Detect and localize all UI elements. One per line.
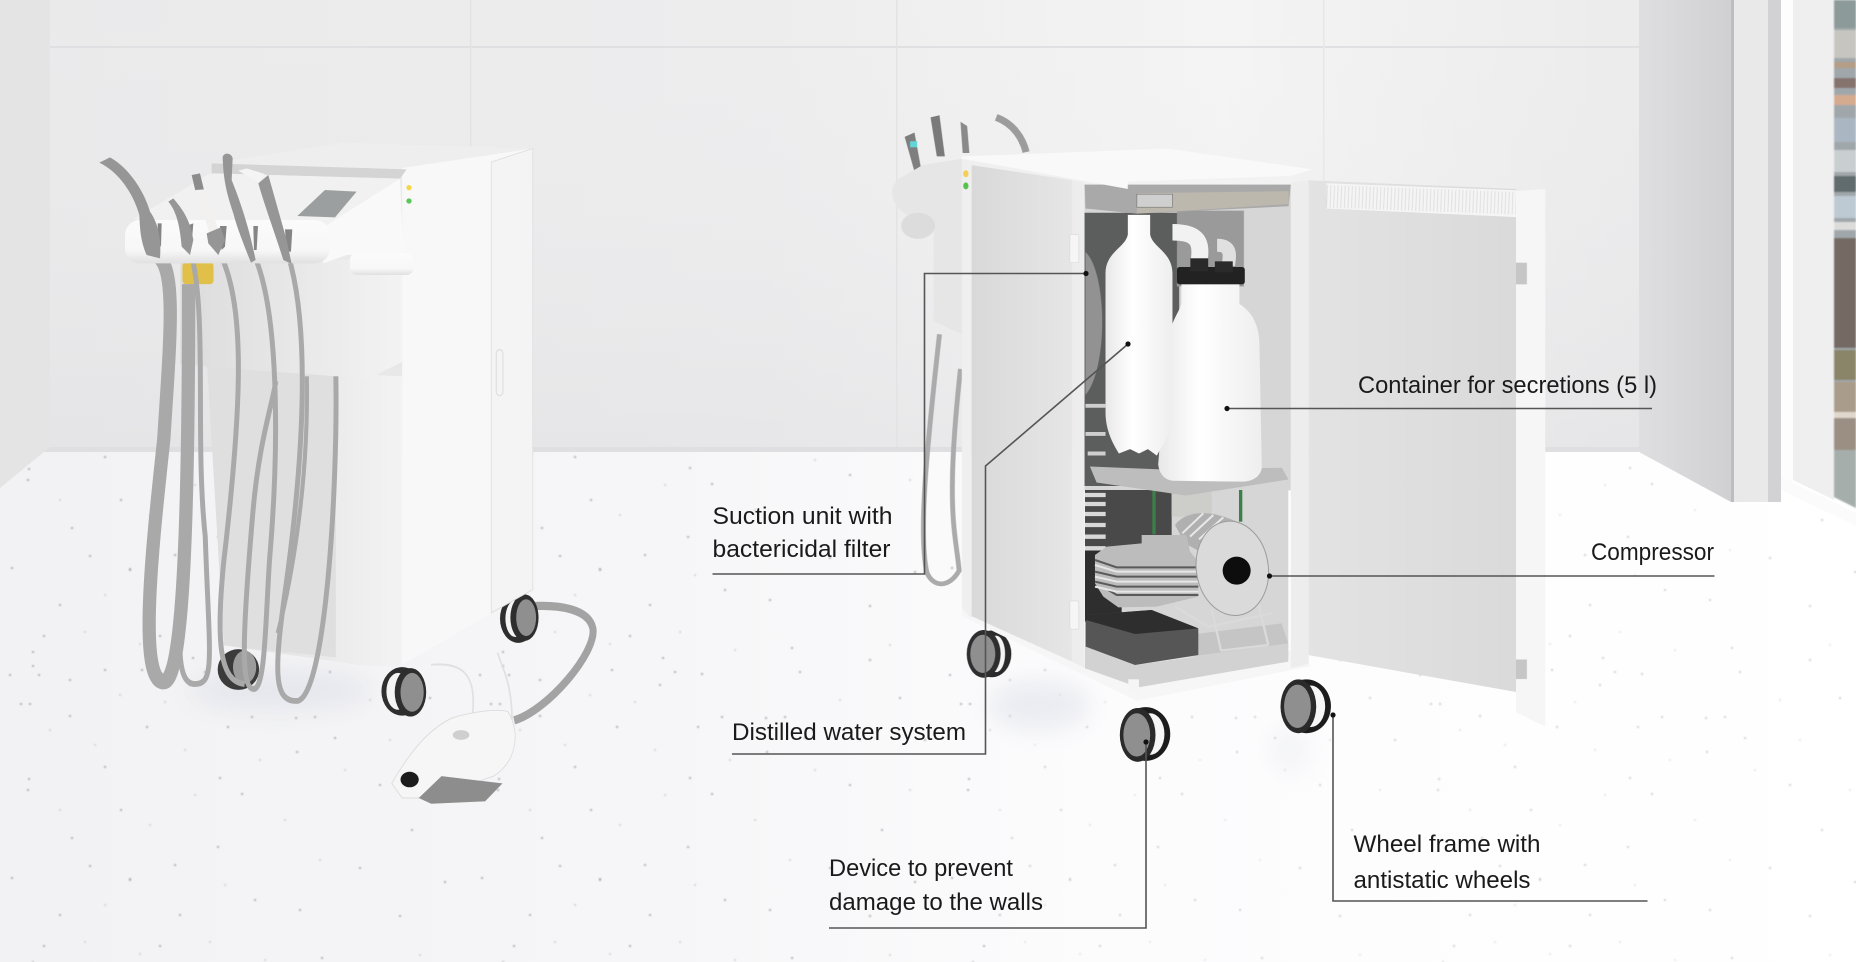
pipes — [1172, 232, 1229, 265]
floor shadows — [190, 670, 1312, 776]
callout: wheel frame: Wheel frame with — [1354, 831, 1540, 858]
rear right wheel — [500, 594, 539, 643]
compressor motor block — [1095, 535, 1198, 607]
callout: suction unit: Suction unit with — [712, 503, 892, 530]
front wheel — [381, 667, 426, 717]
city view through window — [1834, 0, 1856, 508]
rear hidden wheel — [218, 649, 259, 690]
rear wheel — [967, 630, 1011, 678]
callout: distilled water system: Distilled water system — [732, 719, 966, 746]
callout: compressor: Compressor — [1591, 539, 1714, 566]
door vents — [1326, 183, 1516, 217]
column — [1731, 0, 1769, 502]
cart top plate — [214, 143, 533, 175]
callout: wheel frame — [1330, 712, 1648, 901]
right cart lower compartment with compressor — [1085, 488, 1288, 693]
rim — [962, 156, 972, 618]
floor speckles — [0, 450, 1856, 962]
callout: suction unit: bactericidal filter — [712, 536, 891, 563]
yellow connector — [182, 262, 214, 284]
console back — [892, 159, 962, 334]
door — [1309, 180, 1516, 692]
rear handpieces — [905, 115, 1026, 172]
compressor intake hole — [1223, 557, 1251, 585]
callout: distilled water system — [732, 341, 1131, 754]
back wall — [0, 0, 1700, 450]
upper cabinet interior — [1085, 185, 1291, 490]
rail holders — [158, 223, 292, 252]
callout: compressor — [1267, 539, 1714, 579]
callout: container for secretions: Container for secretions (5 l) — [1358, 372, 1657, 399]
frame foot — [1128, 679, 1139, 693]
window frame — [1768, 0, 1781, 502]
right wall — [1639, 0, 1731, 502]
side panel — [972, 165, 1072, 662]
hoses at back — [923, 334, 960, 584]
callout: device to prevent damage: Device to prevent — [829, 855, 1013, 882]
compressor fins housing — [1175, 513, 1237, 560]
display — [297, 190, 357, 217]
callout: container for secretions — [1224, 372, 1657, 411]
cart side below console — [207, 367, 402, 667]
panel latches — [1070, 234, 1079, 629]
left cart console with handpieces — [99, 154, 413, 275]
black box — [1086, 610, 1198, 665]
door-side wheel of right cart — [1281, 679, 1331, 733]
callout: device to prevent damage: damage to the walls — [829, 889, 1043, 916]
cart lid — [962, 149, 1313, 189]
callout: suction unit — [712, 271, 1089, 574]
console slanted face — [133, 173, 400, 228]
top internal bracket — [1085, 185, 1291, 214]
distilled water bottle — [1106, 215, 1172, 456]
left dental cart with hoses and foot pedal — [149, 143, 593, 804]
shelf rods — [1152, 490, 1242, 534]
handpiece rail — [125, 220, 330, 263]
cart base frame — [962, 605, 1312, 701]
spring — [1085, 495, 1106, 548]
console side — [322, 179, 403, 263]
callout: wheel frame: antistatic wheels — [1354, 867, 1530, 894]
container for secretions — [1158, 258, 1262, 482]
status LEDs — [406, 185, 412, 204]
compressor stand — [1175, 601, 1272, 651]
hoses — [149, 255, 336, 701]
lower console box — [180, 260, 402, 379]
tray — [1085, 643, 1288, 687]
foot pedal — [392, 653, 515, 804]
top grey strip — [212, 163, 407, 179]
handpieces — [99, 154, 292, 264]
cart front door panel — [402, 148, 533, 665]
floor — [0, 447, 1856, 962]
front wheel of right cart — [1120, 707, 1170, 762]
callout: device to prevent damage — [829, 739, 1149, 928]
door handle — [496, 350, 503, 396]
right dental cart, door open — [892, 115, 1545, 727]
side handle — [350, 253, 413, 275]
side handle — [901, 213, 935, 239]
foot pedal air hose — [514, 606, 593, 720]
upper compartment contents — [1090, 215, 1289, 496]
compressor end disc — [1190, 516, 1275, 620]
left wall — [0, 0, 50, 488]
door hinge post — [1291, 180, 1309, 668]
shelf — [1090, 466, 1289, 496]
door edge — [1516, 189, 1545, 727]
compartment back — [1085, 488, 1288, 657]
LEDs — [963, 170, 968, 189]
